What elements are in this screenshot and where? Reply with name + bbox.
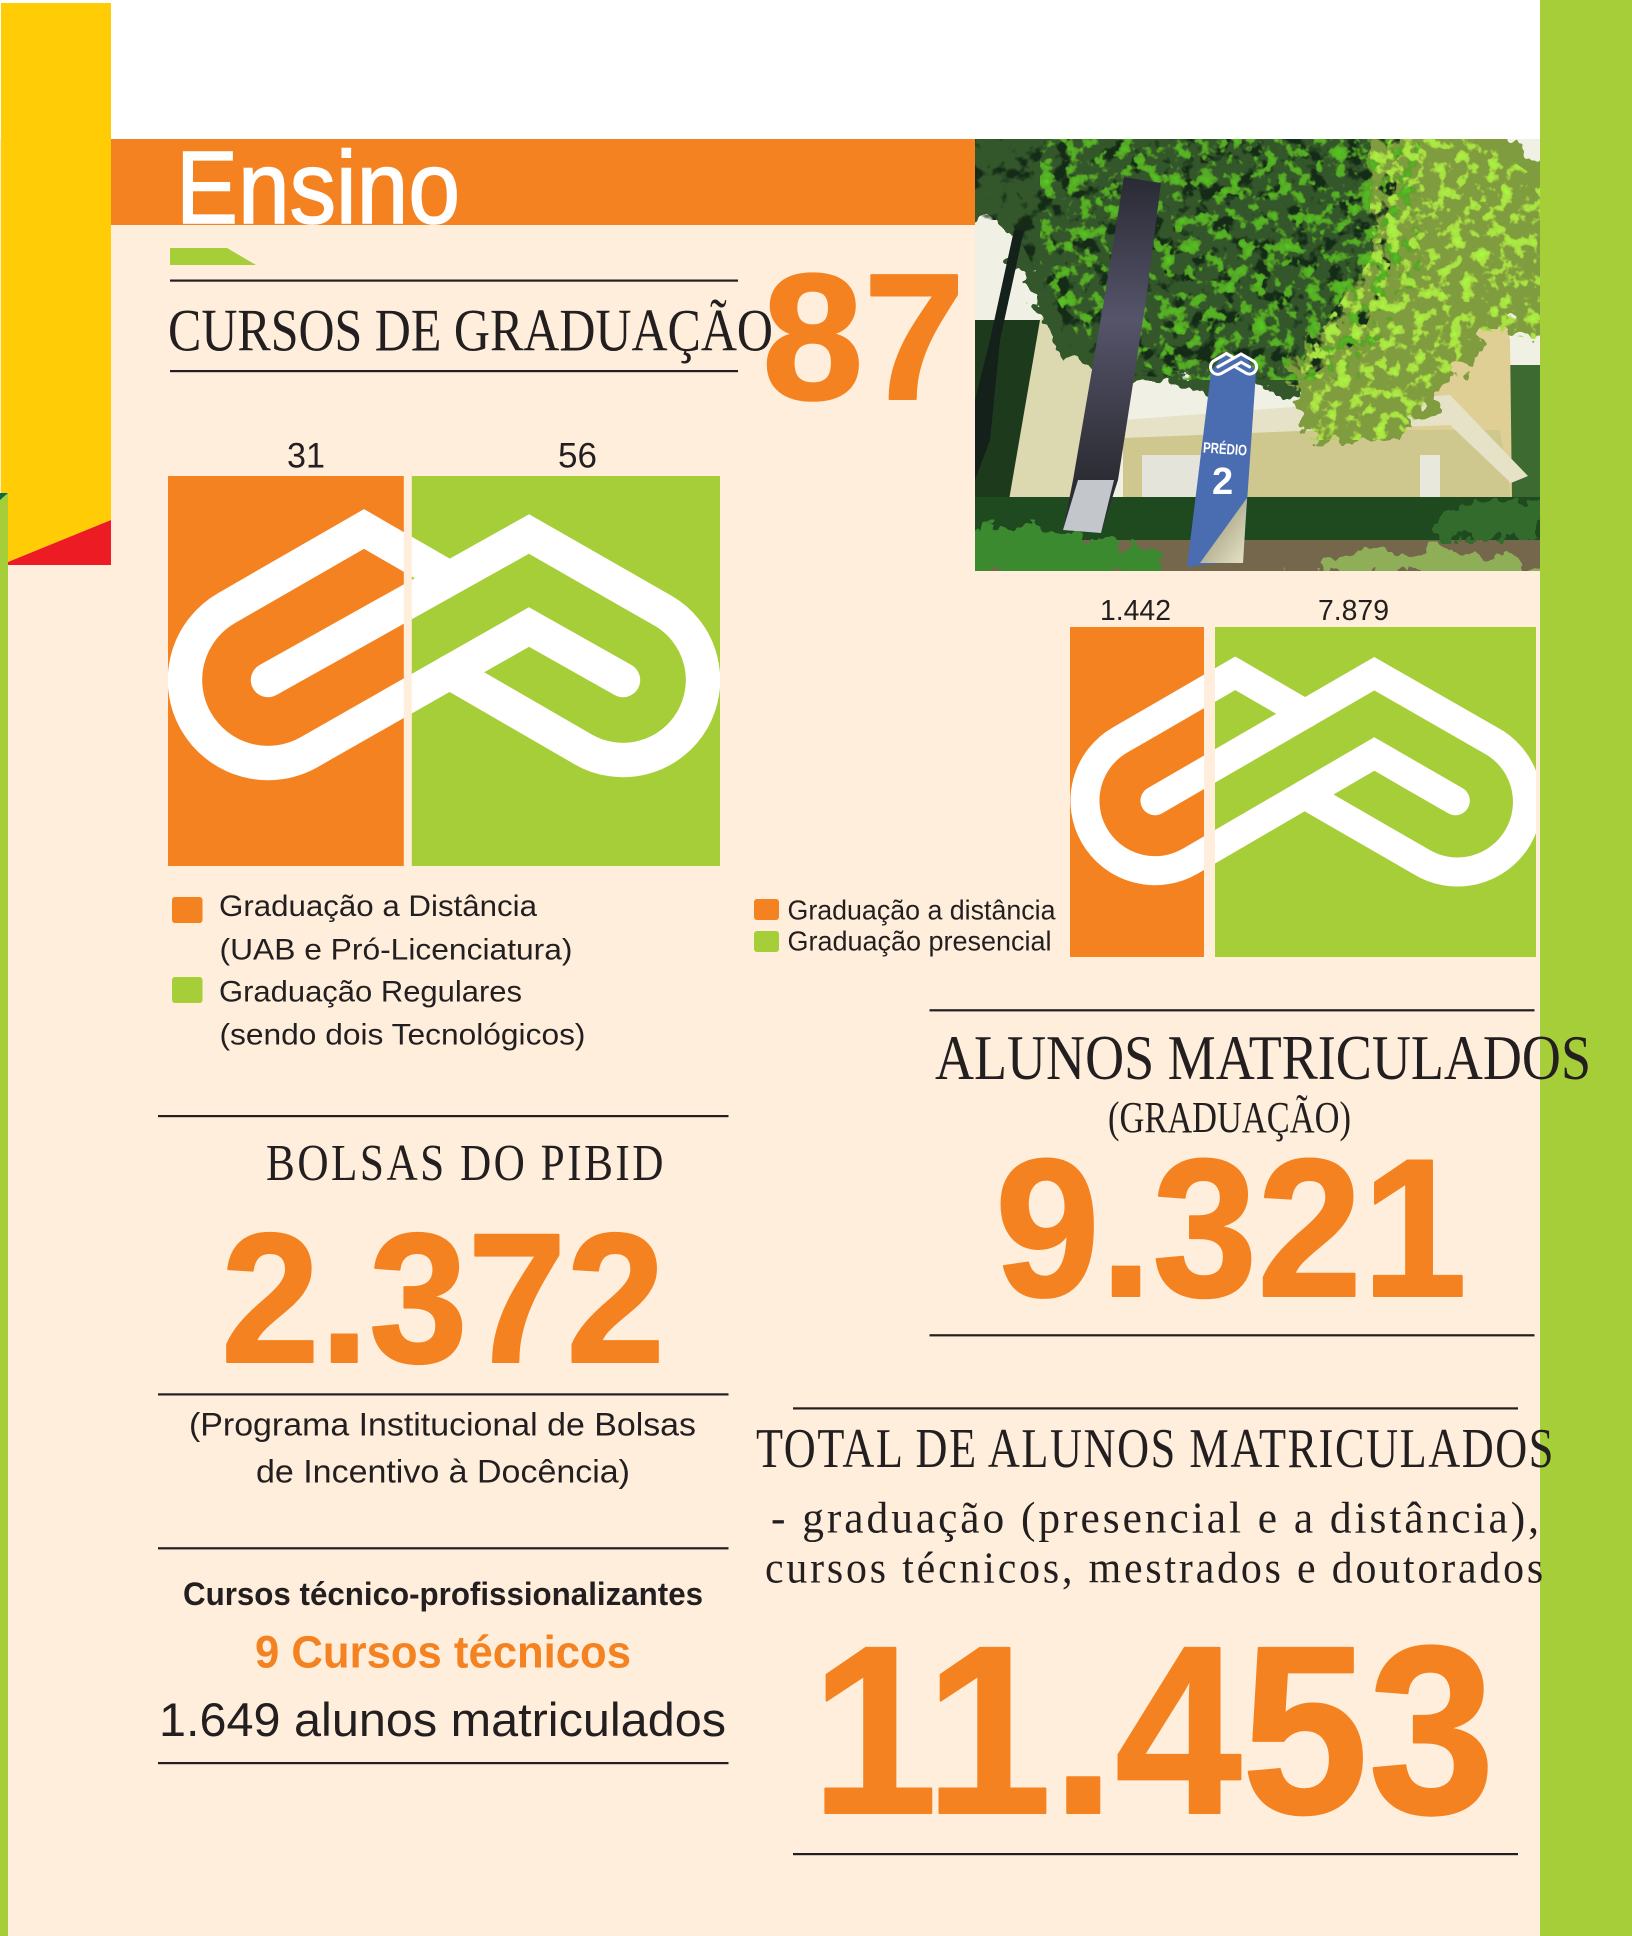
left green strip	[0, 493, 8, 1936]
section: total de alunos matriculados	[756, 1407, 1555, 1864]
green bar	[404, 476, 720, 866]
white top band	[0, 0, 1540, 139]
legend swatch orange	[172, 897, 202, 923]
legend: alunos	[754, 595, 1389, 956]
orange bar	[168, 476, 404, 866]
legend text: tecnológicos: (sendo dois Tecnológicos)	[220, 1018, 586, 1052]
palm trunk	[1063, 177, 1161, 533]
value label 31: 31	[287, 436, 325, 476]
description line 2: cursos técnicos, mestrados e doutorados	[765, 1544, 1546, 1592]
logo ribbon	[1085, 673, 1527, 872]
legend text: presencial: Graduação presencial	[788, 926, 1052, 956]
ground floor wall	[1123, 430, 1510, 497]
section: cursos técnicos	[158, 1547, 728, 1764]
legend text: UAB: (UAB e Pró-Licenciatura)	[220, 934, 572, 966]
door	[1420, 455, 1440, 497]
orange bar	[1070, 627, 1204, 957]
red corner	[8, 520, 111, 565]
section: alunos matriculados	[930, 1009, 1591, 1338]
window	[1142, 455, 1201, 497]
green bar	[1204, 627, 1536, 957]
balcony slab	[1123, 395, 1528, 483]
yellow side band	[1, 3, 111, 565]
foliage base dark	[975, 139, 1380, 400]
bushes right hedge	[1435, 500, 1540, 540]
decorative tab	[170, 248, 256, 265]
big number: 2.372: 2.372	[221, 1196, 665, 1402]
big number: 11.453: 11.453	[811, 1596, 1495, 1864]
sign text: PRÉDIO: PRÉDIO	[1202, 439, 1248, 460]
value label 1.442: 1.442	[1100, 595, 1171, 627]
legend: cursos	[172, 890, 586, 1052]
chart: cursos de graduação split logo	[168, 436, 720, 870]
photo: campus building with sign	[975, 139, 1540, 571]
thin palm	[975, 230, 1024, 480]
big number: 87: 87	[762, 237, 965, 438]
bush base right	[1282, 542, 1540, 571]
legend swatch orange	[754, 899, 779, 920]
background trees	[975, 320, 1040, 500]
legend swatch green	[172, 977, 202, 1003]
value label 56: 56	[558, 436, 597, 476]
legend text: regulares: Graduação Regulares	[219, 976, 522, 1008]
logo ribbon	[185, 529, 703, 763]
description: PIBID line 2: de Incentivo à Docência)	[256, 1454, 630, 1490]
legend swatch green	[754, 931, 779, 952]
sign silver corner	[1200, 498, 1247, 563]
heading: cursos de graduação: CURSOS DE GRADUAÇÃO	[168, 298, 773, 364]
right green band	[1540, 0, 1632, 1936]
bush base left	[975, 520, 1163, 571]
legend text: a distância: Graduação a distância	[788, 894, 1056, 926]
heading: cursos técnico-profissionalizantes: Cursos técnico-profissionalizantes	[183, 1576, 703, 1612]
chart: alunos split logo	[1070, 620, 1536, 962]
description: PIBID: (Programa Institucional de Bolsas	[189, 1406, 696, 1442]
title: Ensino: Ensino	[176, 130, 460, 245]
foliage mid leaves	[1040, 139, 1420, 380]
description line 1: - graduação (presencial e a distância),	[771, 1494, 1542, 1542]
building tower	[1010, 317, 1092, 497]
foliage shadow spots	[975, 139, 1400, 385]
callout: 9 cursos técnicos: 9 Cursos técnicos	[255, 1626, 631, 1678]
sign post	[1187, 354, 1257, 567]
heading: bolsas do PIBID: BOLSAS DO PIBID	[266, 1135, 666, 1192]
subheading: graduação: (GRADUAÇÃO)	[1108, 1093, 1351, 1142]
legend text: distância: Graduação a Distância	[219, 890, 537, 923]
sign text: 2: 2	[1212, 461, 1233, 503]
text: 1.649 alunos matriculados: 1.649 alunos matriculados	[159, 1693, 726, 1746]
value label 7.879: 7.879	[1318, 595, 1389, 627]
section: bolsas do PIBID	[158, 1115, 728, 1490]
big number: 9.321: 9.321	[995, 1118, 1467, 1338]
ground	[975, 540, 1540, 571]
title band	[111, 130, 975, 245]
upper facade	[1405, 324, 1512, 497]
foliage base bright	[1284, 139, 1540, 446]
palm trunk base	[1063, 480, 1114, 533]
hedge	[975, 497, 1540, 543]
foliage bright leaves	[1300, 139, 1540, 440]
sign logo	[1211, 354, 1257, 374]
